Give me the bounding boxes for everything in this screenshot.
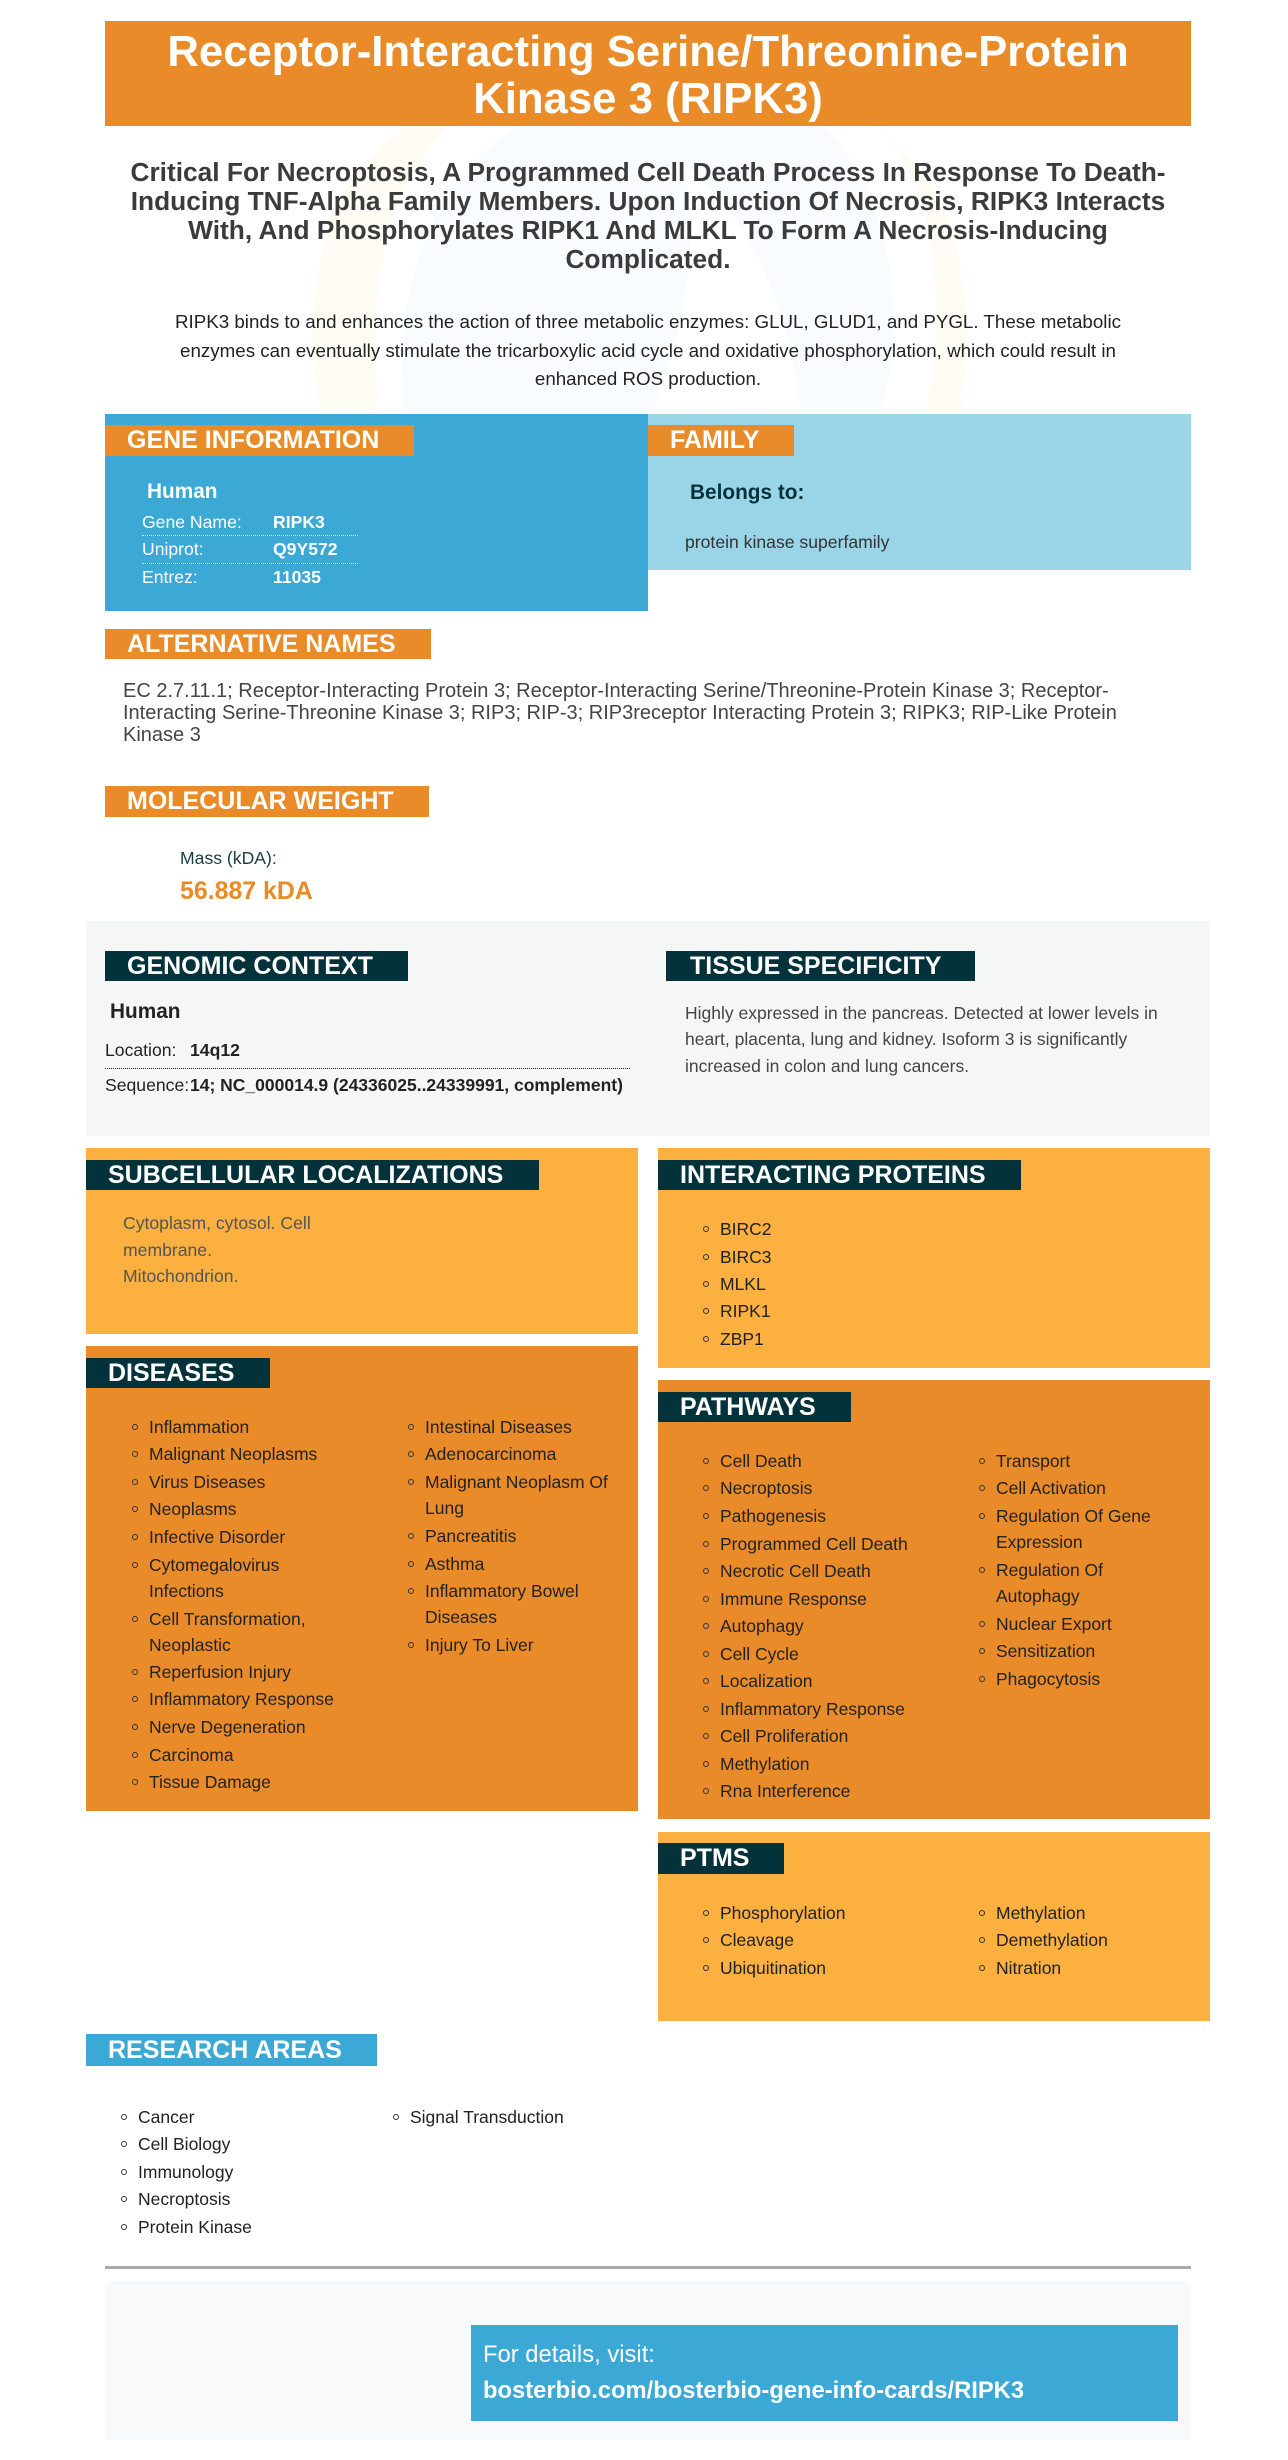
localization text: Mitochondrion. xyxy=(123,1266,238,1286)
pathways list column 1: Inflammatory Response xyxy=(720,1699,905,1719)
ptms list column 2: Demethylation xyxy=(996,1930,1108,1950)
subtitle: Inducing TNF-Alpha Family Members. Upon Induction Of Necrosis, RIPK3 Interacts xyxy=(131,186,1165,216)
footer panel xyxy=(105,2281,1191,2440)
diseases list column 1 xyxy=(132,1417,334,1792)
pathways list column 2: Phagocytosis xyxy=(996,1669,1100,1689)
diseases list column 1: Virus Diseases xyxy=(149,1472,265,1492)
ptms list column 2: Methylation xyxy=(996,1903,1086,1923)
entrez row: Entrez: xyxy=(142,567,198,587)
research areas list column 1: Necroptosis xyxy=(138,2189,230,2209)
protein list: MLKL xyxy=(720,1274,766,1294)
research areas list column 1: Protein Kinase xyxy=(138,2217,252,2237)
intro paragraph: enhanced ROS production. xyxy=(535,368,761,389)
alternative names text: Interacting Serine-Threonine Kinase 3; RIP3; RIP-3; RIP3receptor Interacting Protein 3; RIPK3; RIP-Like Protein xyxy=(123,702,1117,724)
panel: subcellular localizations xyxy=(86,1148,638,1334)
panel: alternative names xyxy=(105,629,1117,746)
pathways list column 1: Necrotic Cell Death xyxy=(720,1561,871,1581)
heading: interacting proteins: INTERACTING PROTEINS xyxy=(680,1161,986,1189)
species label: Human xyxy=(110,1000,180,1023)
pathways list column 2: Transport xyxy=(996,1451,1070,1471)
alternative names text: Kinase 3 xyxy=(123,724,201,746)
diseases list column 1: Inflammatory Response xyxy=(149,1689,334,1709)
title banner xyxy=(105,21,1191,126)
subtitle: With, And Phosphorylates RIPK1 And MLKL To Form A Necrosis-Inducing xyxy=(188,215,1108,245)
heading: subcellular localizations: SUBCELLULAR LOCALIZATIONS xyxy=(108,1161,503,1189)
title text: Kinase 3 (RIPK3) xyxy=(473,74,823,122)
subtitle: Complicated. xyxy=(565,244,731,274)
ptms list column 2 xyxy=(979,1903,1108,1978)
gene info table: Q9Y572 xyxy=(273,539,338,559)
panel: interacting proteins xyxy=(658,1148,1210,1368)
intro paragraph xyxy=(175,311,1121,389)
pathways list column 1 xyxy=(703,1451,908,1801)
panel: ptms xyxy=(658,1832,1210,2021)
protein list: RIPK1 xyxy=(720,1301,771,1321)
diseases list column 1: Neoplasms xyxy=(149,1499,237,1519)
pathways list column 1: Cell Proliferation xyxy=(720,1726,848,1746)
belongs to label: Belongs to: xyxy=(690,481,804,504)
diseases list column 2: Injury To Liver xyxy=(425,1635,534,1655)
heading: pathways xyxy=(658,1392,851,1422)
pathways list column 2: Regulation Of Gene xyxy=(996,1506,1151,1526)
panel: research areas xyxy=(86,2034,564,2237)
diseases list column 2: Pancreatitis xyxy=(425,1526,516,1546)
diseases list column 1: Cell Transformation, xyxy=(149,1609,306,1629)
protein list xyxy=(703,1219,772,1349)
diseases list column 2: Lung xyxy=(425,1498,464,1518)
entrez row xyxy=(142,567,321,587)
heading: family: FAMILY xyxy=(670,426,759,454)
ptms list column 1: Cleavage xyxy=(720,1930,794,1950)
pathways list column 2: Expression xyxy=(996,1532,1083,1552)
heading: pathways: PATHWAYS xyxy=(680,1393,816,1421)
pathways list column 2: Cell Activation xyxy=(996,1478,1106,1498)
intro paragraph: RIPK3 binds to and enhances the action of three metabolic enzymes: GLUL, GLUD1, and PYGL. These metabolic xyxy=(175,311,1121,332)
diseases list column 2: Diseases xyxy=(425,1607,497,1627)
pathways list column 1: Necroptosis xyxy=(720,1478,812,1498)
tissue specificity text: increased in colon and lung cancers. xyxy=(685,1056,969,1076)
subtitle xyxy=(130,157,1166,274)
pathways list column 1: Immune Response xyxy=(720,1589,867,1609)
pathways list column 1: Cell Cycle xyxy=(720,1644,799,1664)
mass label: Mass (kDA): xyxy=(180,848,277,868)
gene name row xyxy=(142,512,325,532)
family value: protein kinase superfamily xyxy=(685,532,889,552)
sequence row: Sequence: xyxy=(105,1075,189,1095)
pathways list column 2: Nuclear Export xyxy=(996,1614,1112,1634)
subtitle: Critical For Necroptosis, A Programmed Cell Death Process In Response To Death- xyxy=(130,157,1166,187)
heading: family xyxy=(648,425,794,456)
ptms list column 1: Phosphorylation xyxy=(720,1903,846,1923)
sequence row: 14; NC_000014.9 (24336025..24339991, complement) xyxy=(190,1075,623,1095)
diseases list column 2: Adenocarcinoma xyxy=(425,1444,556,1464)
call to action link: bosterbio.com/bosterbio-gene-info-cards/RIPK3 xyxy=(483,2377,1024,2404)
pathways list column 1: Localization xyxy=(720,1671,812,1691)
heading: ptms xyxy=(658,1843,784,1874)
protein list: ZBP1 xyxy=(720,1329,764,1349)
panel: pathways xyxy=(658,1380,1210,1819)
heading: molecular weight: MOLECULAR WEIGHT xyxy=(127,787,394,815)
diseases list column 1: Cytomegalovirus xyxy=(149,1555,279,1575)
heading: tissue specificity: TISSUE SPECIFICITY xyxy=(690,952,941,980)
heading: gene information: GENE INFORMATION xyxy=(127,426,379,454)
gene info table: 11035 xyxy=(273,567,321,587)
ptms list column 1: Ubiquitination xyxy=(720,1958,826,1978)
location row xyxy=(105,1040,240,1060)
call to action label: For details, visit: xyxy=(483,2341,655,2368)
pathways list column 1: Programmed Cell Death xyxy=(720,1534,908,1554)
tissue specificity text: heart, placenta, lung and kidney. Isoform 3 is significantly xyxy=(685,1029,1127,1049)
background watermark logo xyxy=(313,126,967,414)
species label: Human xyxy=(147,480,217,503)
ptms list column 1 xyxy=(703,1903,846,1978)
call to action box xyxy=(471,2325,1178,2421)
pathways list column 1: Pathogenesis xyxy=(720,1506,826,1526)
pathways list column 1: Rna Interference xyxy=(720,1781,850,1801)
diseases list column 1: Infective Disorder xyxy=(149,1527,285,1547)
diseases list column 2: Asthma xyxy=(425,1554,484,1574)
research areas list column 1: Cancer xyxy=(138,2107,194,2127)
diseases list column 1: Infections xyxy=(149,1581,224,1601)
protein list: BIRC3 xyxy=(720,1247,772,1267)
diseases list column 1: Reperfusion Injury xyxy=(149,1662,291,1682)
heading: genomic context: GENOMIC CONTEXT xyxy=(127,952,373,980)
title text: Receptor-Interacting Serine/Threonine-Protein xyxy=(167,27,1129,76)
heading: diseases: DISEASES xyxy=(108,1359,234,1387)
diseases list column 2 xyxy=(408,1417,608,1655)
ptms list column 2: Nitration xyxy=(996,1958,1061,1978)
tissue specificity text xyxy=(685,1003,1158,1076)
localization text: membrane. xyxy=(123,1240,212,1260)
heading: ptms: PTMS xyxy=(680,1844,749,1872)
protein list: BIRC2 xyxy=(720,1219,772,1239)
gene name row: Gene Name: xyxy=(142,512,242,532)
research areas list column 1: Cell Biology xyxy=(138,2134,230,2154)
diseases list column 1: Malignant Neoplasms xyxy=(149,1444,317,1464)
pathways list column 2: Sensitization xyxy=(996,1641,1095,1661)
diseases list column 2: Intestinal Diseases xyxy=(425,1417,572,1437)
diseases list column 1: Inflammation xyxy=(149,1417,249,1437)
panel: diseases xyxy=(86,1346,638,1811)
pathways list column 2 xyxy=(979,1451,1151,1689)
pathways list column 1: Methylation xyxy=(720,1754,810,1774)
diseases list column 2: Malignant Neoplasm Of xyxy=(425,1472,608,1492)
research areas list column 1: Immunology xyxy=(138,2162,233,2182)
panel: family xyxy=(648,414,1191,570)
research areas list column 2: Signal Transduction xyxy=(410,2107,564,2127)
alternative names text xyxy=(123,680,1117,746)
pathways list column 2: Regulation Of xyxy=(996,1560,1103,1580)
alternative names text: EC 2.7.11.1; Receptor-Interacting Protein 3; Receptor-Interacting Serine/Threonine-Protein Kinase 3; Receptor- xyxy=(123,680,1109,702)
panel: genomic context and tissue specificity: 14q12 xyxy=(190,1040,240,1060)
location row: Location: xyxy=(105,1040,176,1060)
panel: genomic context and tissue specificity xyxy=(86,921,1210,1136)
diseases list column 1: Neoplastic xyxy=(149,1635,231,1655)
pathways list column 1: Cell Death xyxy=(720,1451,802,1471)
panel: molecular weight xyxy=(105,786,429,905)
heading: research areas: RESEARCH AREAS xyxy=(108,2036,342,2064)
diseases list column 1: Carcinoma xyxy=(149,1745,234,1765)
diseases list column 2: Inflammatory Bowel xyxy=(425,1581,579,1601)
mass value: 56.887 kDA xyxy=(180,877,313,905)
localization text xyxy=(123,1213,311,1286)
title text xyxy=(167,27,1129,122)
diseases list column 1: Tissue Damage xyxy=(149,1772,271,1792)
pathways list column 1: Autophagy xyxy=(720,1616,804,1636)
gene info table xyxy=(142,512,358,587)
diseases list column 1: Nerve Degeneration xyxy=(149,1717,306,1737)
tissue specificity text: Highly expressed in the pancreas. Detected at lower levels in xyxy=(685,1003,1158,1023)
heading: diseases xyxy=(86,1358,270,1388)
localization text: Cytoplasm, cytosol. Cell xyxy=(123,1213,311,1233)
uniprot row: Uniprot: xyxy=(142,539,204,559)
pathways list column 2: Autophagy xyxy=(996,1586,1080,1606)
panel: gene information xyxy=(105,414,648,611)
gene info table: RIPK3 xyxy=(273,512,325,532)
heading: alternative names: ALTERNATIVE NAMES xyxy=(127,630,396,658)
research areas list column 1 xyxy=(121,2107,252,2237)
intro paragraph: enzymes can eventually stimulate the tricarboxylic acid cycle and oxidative phosphorylation, which could result in xyxy=(180,340,1116,361)
uniprot row xyxy=(142,539,338,559)
